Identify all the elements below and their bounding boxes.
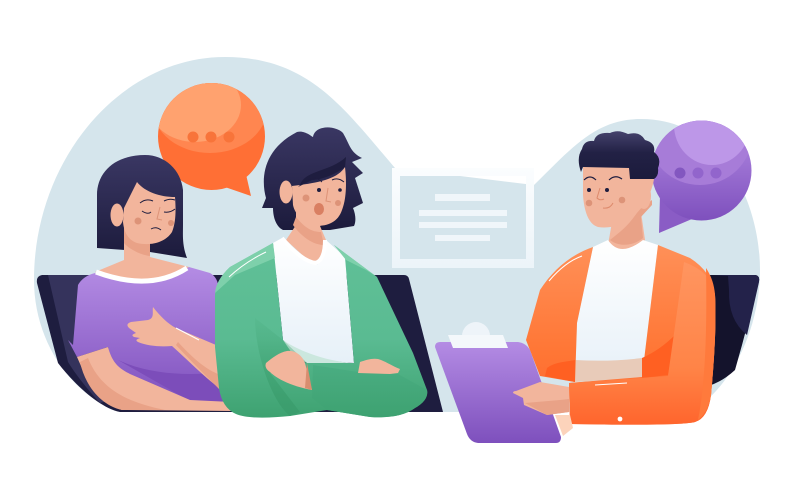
cuff button bbox=[618, 417, 622, 421]
neck bbox=[286, 208, 335, 262]
couch right bbox=[700, 275, 759, 386]
neck bbox=[608, 205, 645, 254]
shirt bbox=[68, 267, 224, 406]
folded arm bbox=[312, 365, 427, 417]
speech bubble: orange bbox=[158, 83, 265, 196]
shirt lower shade bbox=[118, 360, 224, 403]
eyes and brows bbox=[307, 178, 344, 202]
ear shadow bbox=[636, 200, 652, 218]
neck and chest bbox=[95, 225, 189, 290]
person: man in orange bbox=[526, 131, 716, 436]
clipboard bbox=[435, 322, 561, 443]
person: man in green bbox=[215, 127, 427, 418]
face bbox=[292, 167, 346, 226]
hair bbox=[579, 131, 659, 179]
face bbox=[123, 182, 176, 244]
mouth bbox=[314, 203, 324, 215]
person: woman in purple bbox=[68, 155, 232, 411]
neck shadow bbox=[124, 228, 150, 256]
cheeks bbox=[134, 218, 174, 226]
jacket bbox=[215, 243, 427, 418]
left forearm bbox=[266, 351, 312, 390]
sleeve elbow edge bbox=[698, 268, 716, 420]
sleeve highlight lines bbox=[549, 256, 627, 385]
face bbox=[583, 166, 654, 228]
collar bbox=[282, 238, 325, 263]
shoulder highlight bbox=[215, 243, 377, 293]
forearm and hand bbox=[127, 307, 222, 390]
arm bbox=[77, 347, 232, 411]
window panel bbox=[392, 168, 534, 268]
ear bbox=[280, 180, 292, 204]
fringe bbox=[298, 157, 346, 187]
hand holding clipboard bbox=[513, 382, 569, 415]
sleeve bbox=[569, 262, 716, 425]
hair bbox=[97, 155, 187, 258]
collar bbox=[96, 268, 187, 281]
jacket lower shade bbox=[545, 335, 675, 382]
background blob bbox=[34, 57, 760, 412]
illustration: group conversation bbox=[34, 57, 760, 443]
face details bbox=[584, 177, 625, 208]
eyes and mouth bbox=[140, 199, 175, 230]
undershirt bbox=[575, 240, 658, 382]
ear bbox=[637, 183, 651, 209]
cheeks bbox=[302, 194, 341, 206]
right hand bbox=[358, 359, 400, 374]
folded arm shadow bbox=[255, 318, 307, 416]
couch left bbox=[37, 275, 443, 412]
speech bubble: purple bbox=[653, 120, 752, 233]
undershirt bbox=[273, 238, 354, 363]
ear bbox=[110, 204, 124, 226]
hair bbox=[262, 127, 363, 230]
shirt shadow bbox=[575, 358, 642, 382]
undershirt shadow bbox=[283, 340, 354, 367]
sleeve highlight line bbox=[229, 252, 266, 277]
jacket bbox=[526, 245, 716, 425]
wrist below sleeve bbox=[555, 415, 573, 436]
arm shadow bbox=[80, 358, 165, 410]
